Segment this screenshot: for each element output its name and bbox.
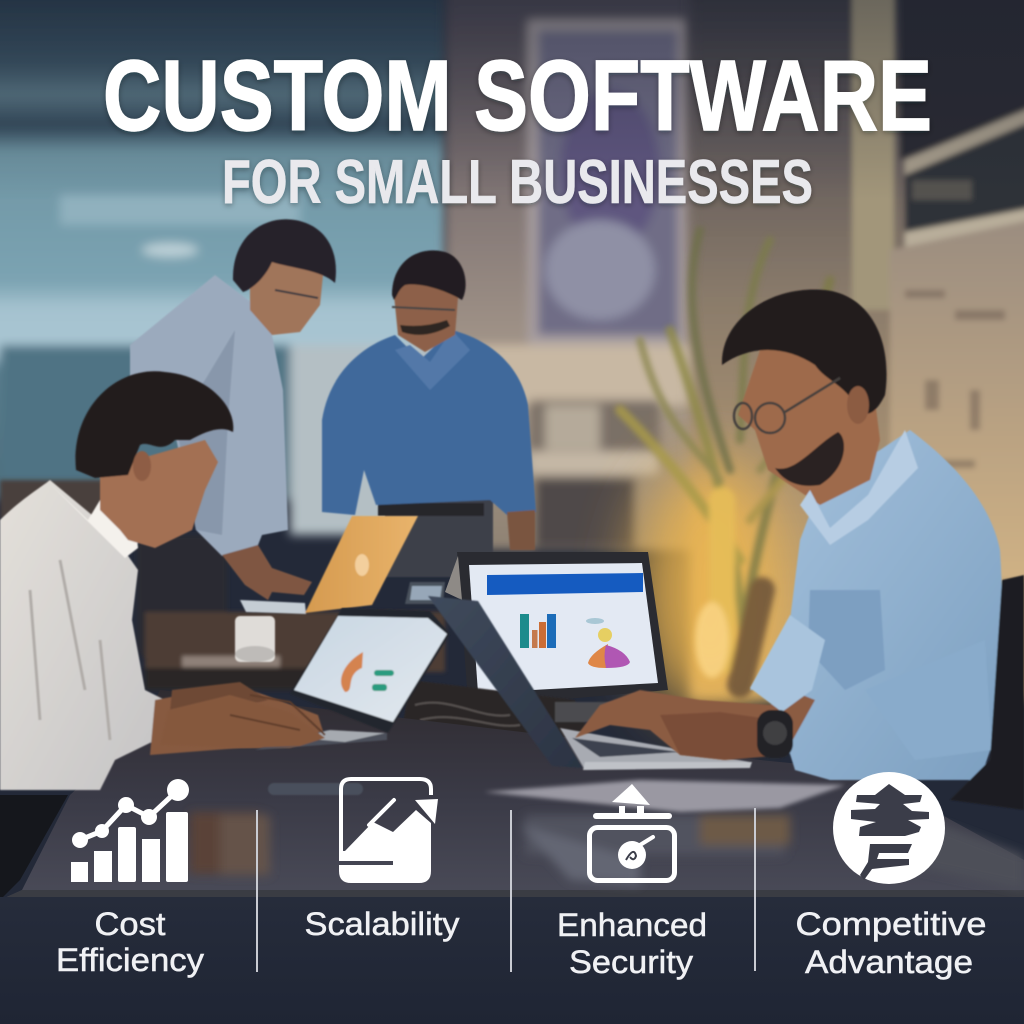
wrist watch <box>757 710 793 758</box>
monitor frame <box>457 552 668 702</box>
blue header bar <box>487 573 643 595</box>
desk background <box>0 480 445 690</box>
coffee mug <box>235 616 275 662</box>
label: cost efficiency: Cost <box>94 906 166 942</box>
laptop screen <box>294 616 447 722</box>
neck and face <box>738 345 880 505</box>
window wall <box>0 0 446 535</box>
laptop: monitor with dashboard <box>445 552 668 702</box>
table <box>0 690 1024 900</box>
icon: cost efficiency chart <box>71 779 189 882</box>
person: seated man left <box>0 371 325 790</box>
label: enhanced security <box>557 907 707 980</box>
hair <box>722 290 887 414</box>
paper on table <box>484 780 845 812</box>
top darkening overlay <box>0 0 1024 200</box>
pen on table <box>268 783 363 795</box>
icon: scalability <box>339 779 438 883</box>
beard <box>775 432 844 486</box>
cables and desk clutter <box>400 680 625 760</box>
label: cost efficiency: Efficiency <box>56 942 204 978</box>
person: seated man right <box>575 290 1024 810</box>
laptop: front left <box>160 608 450 750</box>
shirt <box>0 480 165 790</box>
shirt <box>750 430 1002 780</box>
hair <box>75 371 233 478</box>
right wall with shelves <box>690 0 1024 700</box>
subtitle: FOR SMALL BUSINESSES <box>222 148 813 217</box>
label: competitive advantage <box>796 906 986 980</box>
divider <box>256 810 258 972</box>
laptop: orange background laptop <box>240 516 445 614</box>
ear <box>133 451 151 481</box>
centre wall with poster <box>445 0 705 550</box>
label: competitive advantage: Advantage <box>805 944 973 980</box>
forearm and hands <box>575 690 815 760</box>
rolled sleeve <box>750 615 825 712</box>
warm light glow <box>635 460 785 720</box>
laptop: dark open lid <box>428 596 752 770</box>
bottom band <box>0 897 1024 1024</box>
glasses <box>734 378 840 433</box>
icon: competitive advantage <box>833 772 945 884</box>
dashboard screen <box>469 563 658 693</box>
label: cost efficiency <box>56 906 204 978</box>
label: competitive advantage: Competitive <box>796 906 986 942</box>
chair <box>950 575 1024 810</box>
divider <box>510 810 512 972</box>
label: enhanced security: Enhanced <box>557 907 707 943</box>
divider <box>754 808 756 971</box>
person: standing man centre <box>322 250 536 577</box>
neck and face <box>100 440 218 548</box>
background: office scene <box>0 0 1024 720</box>
person: standing man left <box>130 219 336 600</box>
collar <box>800 430 918 545</box>
arm and hand <box>150 685 325 755</box>
laptop and object reflections <box>190 790 1024 890</box>
plant <box>620 230 860 685</box>
icon: enhanced security <box>590 784 674 880</box>
label: scalability: Scalability <box>304 906 460 942</box>
ear <box>847 386 869 424</box>
bar chart on screen <box>520 614 556 648</box>
chair bottom-left <box>0 795 68 900</box>
label: enhanced security: Security <box>569 944 693 980</box>
pie chart on screen <box>586 618 630 668</box>
